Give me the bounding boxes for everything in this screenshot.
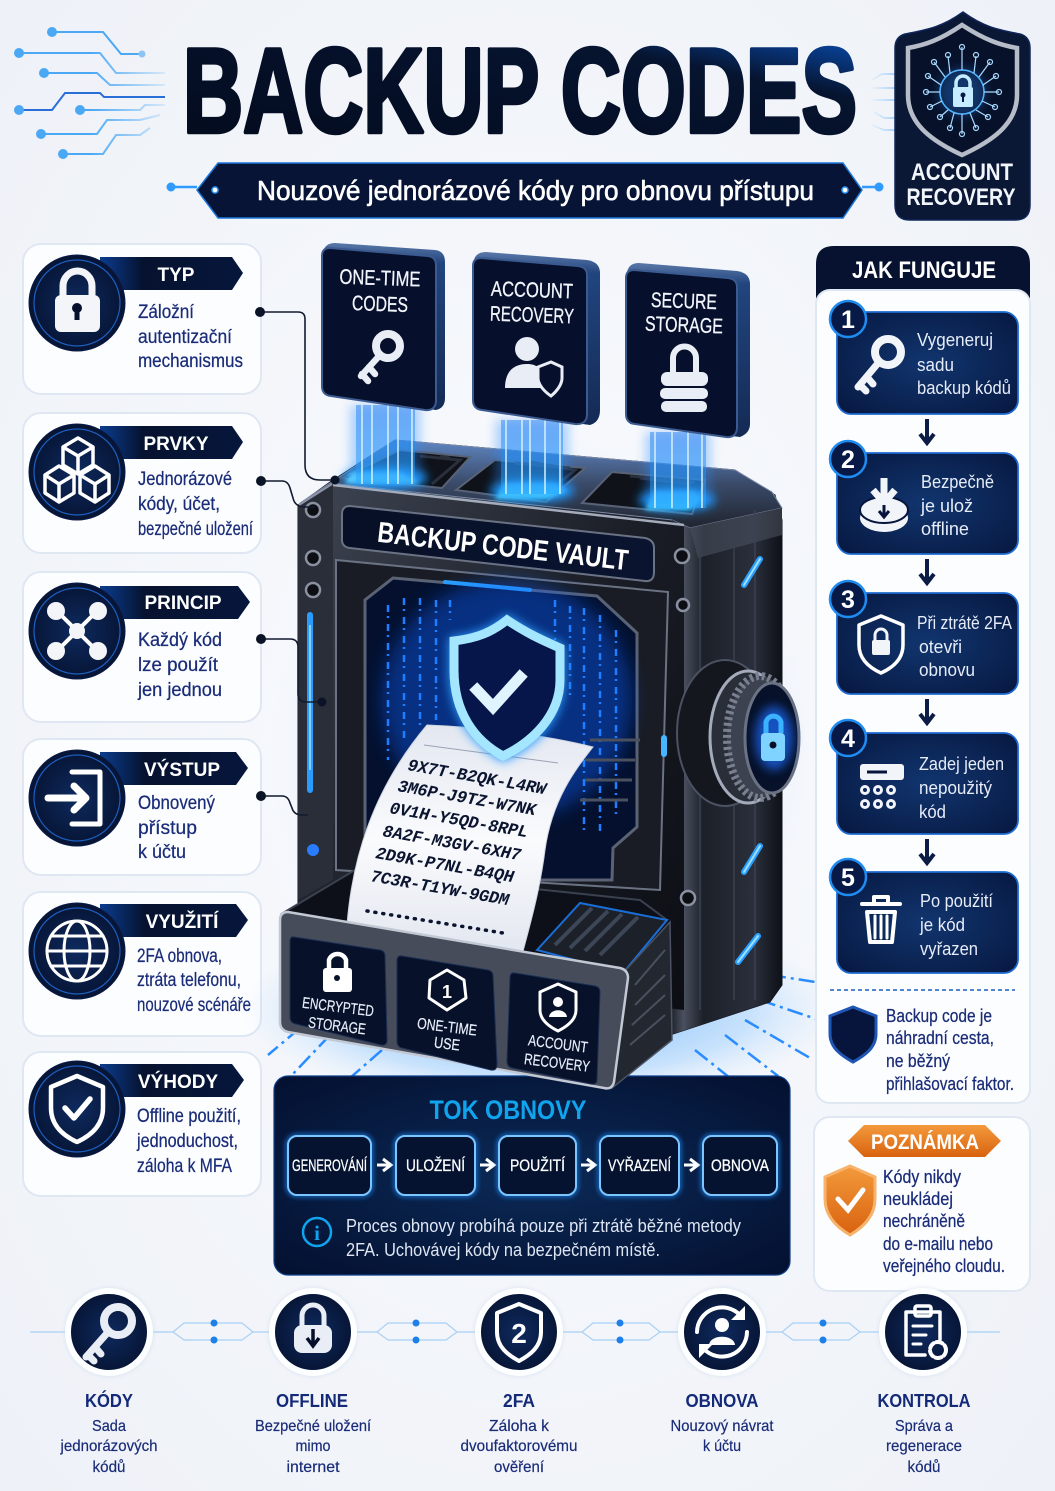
panel: TYP: mechanismus <box>138 351 243 372</box>
paper with codes: 7C3R-T1YW-9GDM <box>369 868 511 911</box>
vault illustration <box>280 440 799 1088</box>
connector lines from left cards to vault <box>255 307 340 815</box>
panel: POZNÁMKA: veřejného cloudu. <box>883 1256 1005 1276</box>
bottom item: OFFLINE: internet <box>286 1459 340 1476</box>
panel: VYUŽITÍ: 2FA obnova, <box>137 946 222 967</box>
step 1: sadu <box>917 354 954 375</box>
bottom item: OBNOVA: k účtu <box>703 1438 741 1455</box>
flow step: OBNOVA <box>711 1156 770 1175</box>
panel: TOK OBNOVY <box>274 1076 790 1275</box>
drawer panel: encrypted storage <box>290 937 387 1045</box>
panel: VÝSTUP: Obnovený <box>138 793 215 814</box>
icon: exit door <box>29 750 125 846</box>
panel: PRINCIP <box>23 572 261 722</box>
bottom item: KÓDY <box>60 1288 158 1476</box>
panel: VYUŽITÍ: nouzové scénáře <box>137 995 251 1016</box>
vault left column <box>298 484 333 900</box>
step 5 <box>830 859 1018 973</box>
vault top face <box>300 440 782 528</box>
note text: ne běžný <box>886 1051 950 1071</box>
card: one-time codes: ONE-TIME <box>339 266 421 291</box>
step 5: Po použití <box>920 890 994 911</box>
step 2: je ulož <box>920 495 973 516</box>
panel: TYP: Záložní <box>138 302 195 323</box>
step 5: vyřazen <box>920 938 978 959</box>
flow step: VYŘAZENÍ <box>608 1156 671 1175</box>
badge: account recovery: ACCOUNT <box>911 159 1013 186</box>
paper with codes: 2D9K-P7NL-B4QH <box>374 845 516 888</box>
panel: PRINCIP: lze použít <box>138 655 219 676</box>
step 4: 4 <box>841 725 855 753</box>
arrow <box>920 699 934 723</box>
flow step <box>396 1136 475 1195</box>
bottom item: KÓDY: jednorázových <box>60 1438 158 1455</box>
note text: náhradní cesta, <box>886 1028 994 1048</box>
icon: nodes <box>29 583 125 679</box>
card: account recovery: RECOVERY <box>490 303 574 328</box>
step 2 <box>830 441 1018 554</box>
vault front panel <box>333 484 684 1010</box>
bottom item: OFFLINE: Bezpečné uložení <box>255 1418 372 1435</box>
bottom item: 2FA: ověření <box>494 1459 545 1476</box>
bottom item: OBNOVA: Nouzový návrat <box>670 1418 774 1435</box>
flow step <box>703 1136 777 1195</box>
step 2: 2 <box>841 446 855 474</box>
step 3: 3 <box>841 586 855 614</box>
panel: PRINCIP: jen jednou <box>137 680 222 701</box>
panel: TYP: autentizační <box>138 327 233 348</box>
panel: VÝHODY: Offline použití, <box>137 1106 241 1127</box>
panel: VYUŽITÍ: VYUŽITÍ <box>146 911 219 933</box>
icon: shield check <box>29 1061 125 1157</box>
bottom item: KÓDY: KÓDY <box>85 1390 134 1411</box>
flow step: POUŽITÍ <box>510 1156 565 1175</box>
flow arrow <box>480 1159 494 1171</box>
step 1: Vygeneruj <box>917 329 993 350</box>
panel: TOK OBNOVY: 2FA. Uchovávej kódy na bezpečném místě. <box>346 1239 660 1260</box>
panel: VÝHODY: jednoduchost, <box>136 1131 238 1152</box>
paper with codes <box>347 725 593 955</box>
icon: key <box>361 334 400 381</box>
panel: TYP <box>23 244 261 394</box>
dial with lock <box>677 660 799 806</box>
icon: cubes <box>29 424 125 520</box>
drawer panel: one-time use: 1 <box>442 982 452 1002</box>
drawer panel: one-time use: USE <box>433 1034 461 1055</box>
icon: globe <box>29 903 125 999</box>
drawer panel: one-time use: ONE-TIME <box>416 1015 478 1040</box>
note text: přihlašovací faktor. <box>886 1074 1014 1094</box>
panel: VÝHODY <box>23 1052 261 1196</box>
icon: info <box>303 1218 331 1246</box>
decorative circuit lines left of title <box>14 27 165 159</box>
bottom item: 2FA: 2FA <box>503 1390 535 1411</box>
drawer panel: account recovery: RECOVERY <box>523 1051 591 1076</box>
step 5: 5 <box>841 864 855 892</box>
drawer front <box>280 912 672 1088</box>
drawer top ledge <box>283 870 667 973</box>
card: secure storage: STORAGE <box>645 313 723 338</box>
panel: POZNÁMKA: neukládej <box>883 1189 953 1209</box>
vault floor glow <box>240 430 840 1105</box>
step 3 <box>830 581 1018 694</box>
step 5: je kód <box>919 914 965 935</box>
bottom connector strip <box>30 1320 1000 1344</box>
bottom item: KONTROLA <box>878 1288 970 1476</box>
badge: account recovery: RECOVERY <box>906 184 1016 211</box>
bottom item: KONTROLA: KONTROLA <box>878 1390 970 1411</box>
step 3: obnovu <box>919 659 975 680</box>
light beams from cards to vault <box>350 405 711 508</box>
vault body <box>298 440 782 1035</box>
bottom item: 2FA <box>460 1288 578 1476</box>
arrow <box>920 419 934 443</box>
panel: PRVKY: kódy, účet, <box>138 494 220 515</box>
bottom item: OFFLINE <box>255 1288 372 1476</box>
panel: POZNÁMKA <box>814 1117 1030 1291</box>
panel: TYP: TYP <box>158 265 195 286</box>
note text <box>886 1006 1014 1094</box>
vault inner frame and recess <box>336 560 668 890</box>
icon: orange shield <box>825 1166 875 1235</box>
bottom item: 2FA: dvoufaktorovému <box>460 1438 578 1455</box>
step 3: otevři <box>919 636 962 657</box>
flow step: ULOŽENÍ <box>406 1156 465 1175</box>
flow step: GENEROVÁNÍ <box>292 1156 367 1175</box>
panel: PRVKY <box>23 413 261 553</box>
bottom item: KONTROLA: regenerace <box>886 1438 962 1455</box>
step 4: kód <box>919 801 946 822</box>
subtitle ribbon <box>166 163 884 218</box>
icon: user with shield <box>505 337 562 396</box>
vault shield <box>449 614 565 762</box>
paper with codes: 0V1H-Y5QD-8RPL <box>388 800 529 843</box>
panel: VÝSTUP: přístup <box>138 818 197 839</box>
paper with codes: 9X7T-B2QK-L4RW <box>406 757 549 801</box>
bottom item: OFFLINE: OFFLINE <box>276 1390 348 1411</box>
panel: VÝHODY: VÝHODY <box>138 1071 218 1093</box>
panel: VÝSTUP: k účtu <box>138 842 186 863</box>
bottom item: OFFLINE: mimo <box>296 1438 331 1455</box>
panel: POZNÁMKA: Kódy nikdy <box>883 1167 961 1187</box>
subtitle ribbon: Nouzové jednorázové kódy pro obnovu přístupu <box>257 175 814 206</box>
panel: POZNÁMKA: do e-mailu nebo <box>883 1234 993 1254</box>
panel: VÝHODY: záloha k MFA <box>137 1156 232 1177</box>
arrow <box>920 839 934 863</box>
step 2: offline <box>921 518 969 539</box>
icon: lock <box>29 255 125 351</box>
panel: VÝSTUP <box>23 739 261 875</box>
step 4 <box>830 720 1018 834</box>
card: account recovery <box>473 252 600 425</box>
panel: PRVKY: Jednorázové <box>138 469 232 490</box>
panel: TOK OBNOVY: TOK OBNOVY <box>430 1095 586 1125</box>
badge: account recovery <box>895 12 1030 220</box>
note text: Backup code je <box>886 1006 992 1026</box>
paper with codes: 8A2F-M3GV-6XH7 <box>381 823 523 866</box>
icon: shield <box>830 1007 876 1062</box>
bottom item: KÓDY: Sada <box>92 1418 126 1435</box>
panel: PRVKY: PRVKY <box>143 434 209 455</box>
step 1: backup kódů <box>917 377 1011 398</box>
panel: JAK FUNGUJE <box>816 246 1030 1103</box>
blue LED indicator <box>661 735 667 757</box>
bottom item: OBNOVA <box>670 1288 774 1455</box>
flow step <box>600 1136 679 1195</box>
flow arrow <box>684 1159 698 1171</box>
card: one-time codes <box>322 243 445 410</box>
drawer panel: encrypted storage: STORAGE <box>307 1015 367 1038</box>
panel: PRINCIP: Každý kód <box>138 630 222 651</box>
nameplate: vault title: BACKUP CODE VAULT <box>376 517 630 577</box>
panel: POZNÁMKA: POZNÁMKA <box>871 1131 979 1154</box>
panel: PRINCIP: PRINCIP <box>144 593 222 614</box>
bottom item: KONTROLA: Správa a <box>895 1418 953 1435</box>
flow step <box>288 1136 371 1195</box>
icon: info: i <box>314 1221 320 1245</box>
card: secure storage: SECURE <box>651 289 717 314</box>
drawer panel: one-time use <box>397 956 497 1070</box>
bottom item: OBNOVA: OBNOVA <box>686 1390 758 1411</box>
drawer panel: account recovery <box>507 973 600 1084</box>
drawer panel: account recovery: ACCOUNT <box>527 1032 589 1057</box>
paper with codes: 3M6P-J9TZ-W7NK <box>396 778 539 822</box>
panel: TOK OBNOVY: Proces obnovy probíhá pouze při ztrátě běžné metody <box>346 1215 742 1236</box>
flow arrow <box>377 1159 391 1171</box>
card: one-time codes: CODES <box>352 292 408 317</box>
step 3: Při ztrátě 2FA <box>917 612 1013 633</box>
panel: JAK FUNGUJE: JAK FUNGUJE <box>852 257 996 284</box>
bottom item: 2FA: Záloha k <box>489 1418 550 1435</box>
bottom item: KONTROLA: kódů <box>908 1458 940 1476</box>
step 1: 1 <box>841 306 855 334</box>
step 4: nepoužitý <box>919 777 993 798</box>
vault right side face <box>670 508 782 1035</box>
nameplate: vault title <box>342 506 654 581</box>
bottom item: KÓDY: kódů <box>92 1458 126 1476</box>
card: account recovery: ACCOUNT <box>491 278 573 303</box>
step 4: Zadej jeden <box>919 753 1004 774</box>
panel: VÝSTUP: VÝSTUP <box>144 759 220 781</box>
drawer panel: encrypted storage: ENCRYPTED <box>301 995 375 1020</box>
step 1 <box>830 301 1018 414</box>
icon: lock on database <box>660 346 708 412</box>
panel: VYUŽITÍ <box>23 892 261 1036</box>
panel: POZNÁMKA: nechráněně <box>883 1211 965 1231</box>
bottom item: 2FA: 2 <box>511 1318 527 1349</box>
flow step <box>499 1136 576 1195</box>
panel: VYUŽITÍ: ztráta telefonu, <box>137 970 241 991</box>
panel: PRVKY: bezpečné uložení <box>138 519 254 540</box>
step 2: Bezpečně <box>921 471 994 492</box>
arrow <box>920 559 934 583</box>
flow arrow <box>581 1159 595 1171</box>
card: secure storage <box>626 263 750 437</box>
